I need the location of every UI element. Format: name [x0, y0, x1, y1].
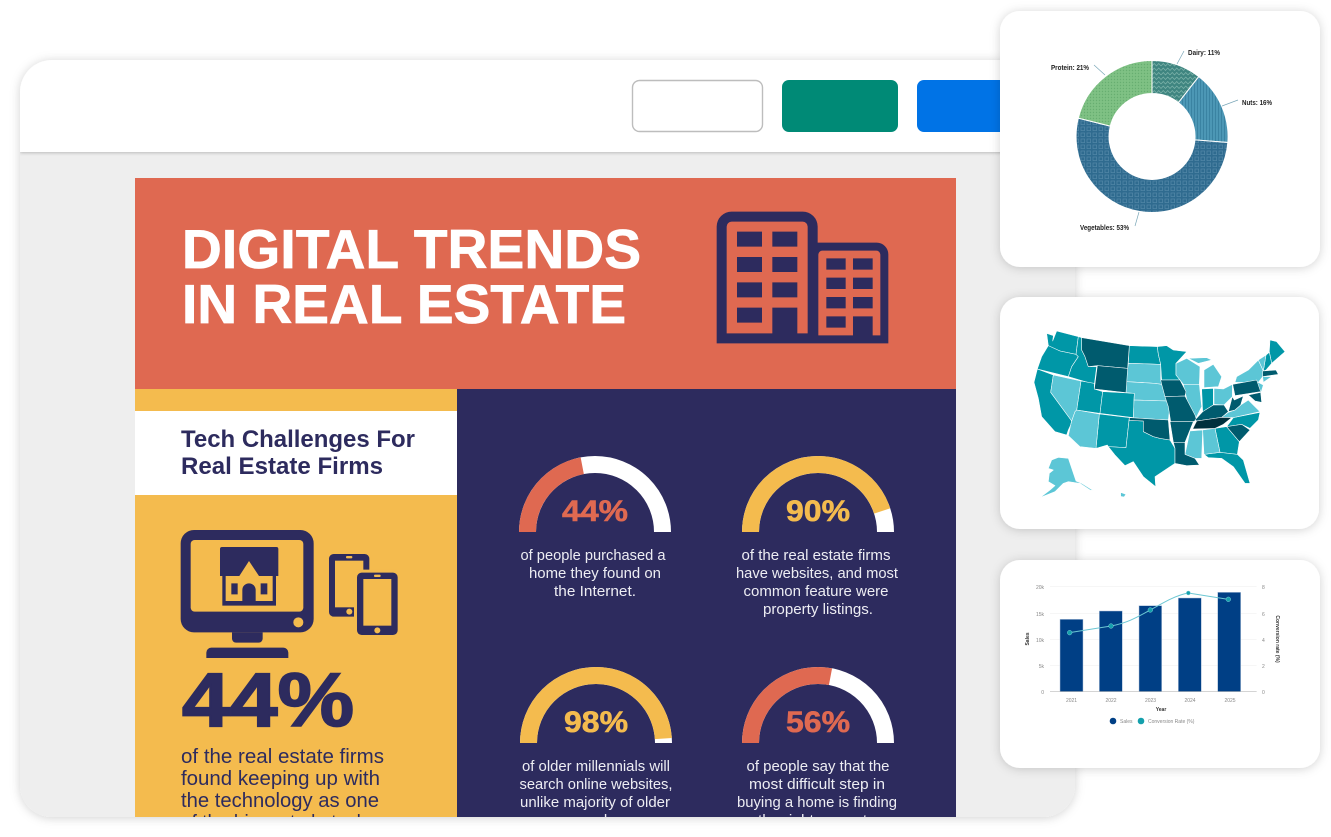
chart axis labels: [1025, 585, 1280, 713]
donut labels: Dairy: 11%: [1188, 48, 1220, 57]
gridlines: [1050, 587, 1257, 666]
chart legend: [1110, 718, 1195, 725]
gauge: 90%: common feature were: [744, 583, 888, 600]
gauge: 44%: of people purchased a: [520, 547, 666, 564]
chart legend: Conversion Rate (%): [1148, 719, 1195, 725]
gauge: 56%: most difficult step in: [749, 776, 885, 793]
right panel: gauges: [457, 389, 956, 829]
icon: monitor with house and mobile devices: [181, 530, 401, 658]
title: [185, 229, 640, 324]
chart axis labels: 15k: [1036, 612, 1044, 618]
bar and line chart: [1050, 587, 1257, 692]
gauge: 44%: 44%: [562, 495, 628, 528]
gauge: 90%: property listings.: [763, 601, 873, 618]
gauge: 98%: of older millennials will: [522, 758, 670, 775]
chart axis labels: 6: [1262, 612, 1265, 618]
subheading band: Real Estate Firms: [181, 453, 383, 480]
donut labels: Nuts: 16%: [1242, 98, 1272, 107]
subheading band: [135, 411, 457, 495]
gauge: 56%: of people say that the: [746, 758, 890, 775]
donut labels: [1051, 48, 1272, 232]
gauge: 98%: 98%: [564, 706, 628, 739]
title: DIGITAL TRENDS: [182, 218, 641, 280]
chart axis labels: 8: [1262, 585, 1265, 591]
gauge: 56%: buying a home is finding: [737, 794, 897, 811]
bars: [1060, 592, 1241, 692]
gauge: 56%: the right property.: [758, 812, 878, 829]
chart axis labels: 0: [1262, 690, 1265, 696]
chart legend: Sales: [1120, 719, 1133, 725]
chart axis labels: Conversion rate (%): [1274, 615, 1280, 663]
gauge: 44%: [520, 464, 666, 600]
gauge: 56%: 56%: [786, 706, 850, 739]
stat description: of the real estate firms: [181, 745, 384, 768]
Tennessee: [1193, 417, 1232, 429]
subheading band: Tech Challenges For: [181, 426, 415, 453]
chart axis labels: Year: [1156, 707, 1166, 713]
icon: office buildings: [717, 212, 888, 343]
chart axis labels: Sales: [1025, 632, 1031, 646]
title: IN REAL ESTATE: [182, 273, 626, 335]
chart axis labels: 2: [1262, 664, 1265, 670]
gauge: 90%: 90%: [786, 495, 850, 528]
card: US map: [1000, 297, 1319, 529]
donut labels: Vegetables: 53%: [1080, 223, 1129, 232]
gauge: 90%: of the real estate firms: [742, 547, 890, 564]
chart axis labels: 5k: [1039, 664, 1044, 670]
header band: [135, 178, 956, 389]
conversion rate line: [1067, 591, 1231, 635]
chart axis labels: 2024: [1184, 698, 1196, 704]
gauge: 90%: have websites, and most: [736, 565, 899, 582]
stat description: found keeping up with: [181, 767, 380, 790]
chart axis labels: 2023: [1145, 698, 1156, 704]
chart axis labels: 10k: [1036, 638, 1044, 644]
left panel: tech challenges: [135, 389, 457, 834]
infographic: [135, 178, 956, 834]
chart axis labels: 2025: [1224, 698, 1236, 704]
gauge: 98%: [520, 676, 672, 829]
gauge: 44%: home they found on: [529, 565, 661, 582]
gauge: 98%: people.: [570, 812, 620, 829]
chart axis labels: 0: [1041, 690, 1044, 696]
gauge: 98%: search online websites,: [520, 776, 672, 793]
choropleth map: [1034, 331, 1285, 498]
gauge: 44%: the Internet.: [554, 583, 636, 600]
chart axis labels: 2021: [1066, 698, 1077, 704]
browser toolbar: [20, 60, 1075, 152]
card: donut chart: [1000, 11, 1320, 267]
gauge: 90%: [736, 464, 899, 618]
gauge: 98%: unlike majority of older: [520, 794, 670, 811]
gauge: 56%: [737, 676, 897, 829]
donut chart: [1076, 60, 1228, 213]
donut labels: Protein: 21%: [1051, 63, 1089, 72]
stat description: the technology as one: [181, 789, 379, 812]
big stat 44%: 44%: [182, 658, 354, 743]
stat description: [181, 748, 384, 817]
outlined button: [632, 80, 762, 132]
segment: dairy: [1152, 60, 1199, 103]
segment: protein: [1078, 60, 1152, 126]
stat description: of the biggest obstacles: [181, 811, 381, 834]
green button: [782, 80, 898, 132]
card: combo chart: [1000, 560, 1320, 768]
chart axis labels: 4: [1262, 638, 1265, 644]
segment: vegetables: [1076, 118, 1228, 213]
segment: nuts: [1178, 77, 1228, 142]
browser window: [20, 60, 1075, 834]
chart axis labels: 2022: [1105, 698, 1117, 704]
chart axis labels: 20k: [1036, 585, 1044, 591]
blue button: [917, 80, 1000, 132]
